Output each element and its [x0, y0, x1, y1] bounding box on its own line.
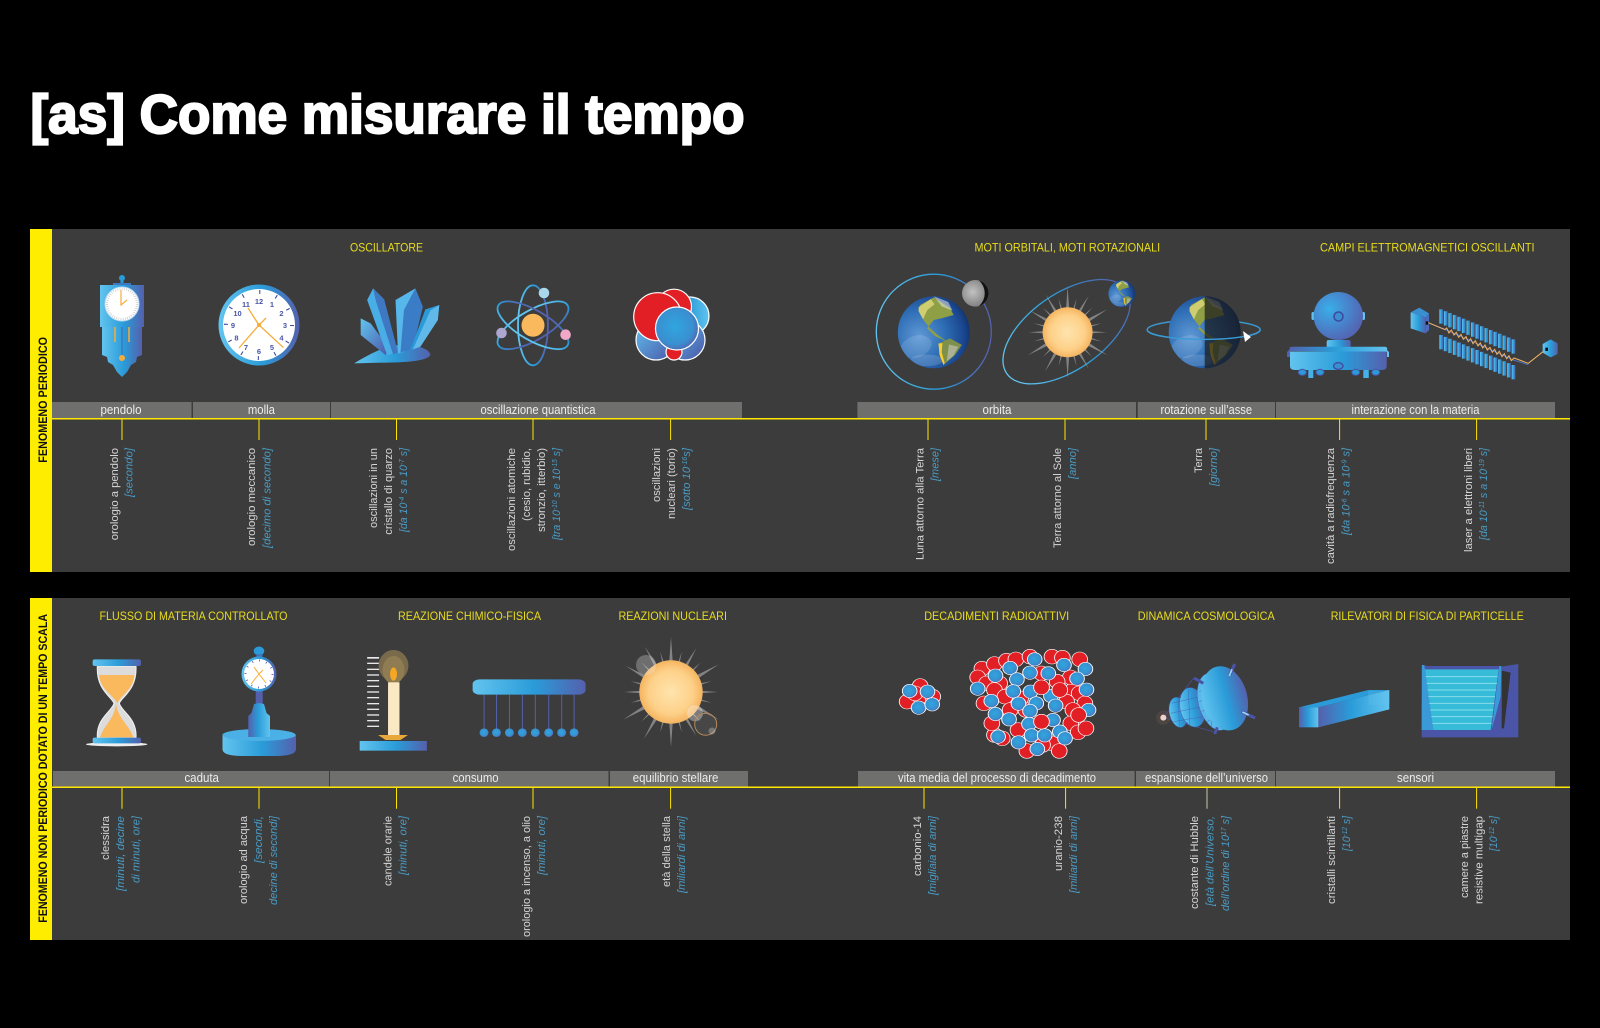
title: [as] Come misurare il tempo: [30, 83, 744, 145]
label: orologio ad acqua: [secondi,: [253, 816, 265, 864]
label: oscillazioni atomiche: s]: [551, 447, 563, 459]
label: costante di hubble: s]: [1220, 815, 1232, 827]
label: orologio ad acqua: [238, 815, 280, 905]
label: laser a elettroni liberi: -11: [1479, 501, 1486, 510]
label: candele orarie: [minuti, ore]: [398, 815, 410, 876]
label: camere a piastre: -12: [1489, 827, 1496, 836]
label: uranio-238: [miliardi di anni]: [1068, 815, 1080, 894]
label: costante di hubble: [età dell’Universo,: [1204, 816, 1216, 907]
label: orologio a pendolo: [secondo]: [124, 447, 136, 498]
category bar: oscillazione quantistica: oscillazione quantistica: [480, 402, 596, 417]
icon: star: [621, 637, 721, 747]
category bar: equilibrio stellare: equilibrio stellare: [633, 770, 718, 785]
label: cristallo di quarzo: s a 10: [398, 464, 410, 497]
icon: mechanical wall clock: 10: [233, 309, 242, 318]
label: terra: Terra: [1193, 447, 1205, 473]
icon: mechanical wall clock: 11: [242, 300, 250, 309]
label: oscillazioni atomiche: [506, 447, 563, 551]
label: eta della stella: [661, 815, 688, 894]
label: cavita a radiofrequenza: -6: [1342, 498, 1348, 505]
label: cristalli scintillanti: [1326, 815, 1353, 904]
label: orologio meccanico: [decimo di secondo]: [262, 447, 274, 549]
label: cavita a radiofrequenza: [da 10: [1340, 504, 1352, 535]
label: cristallo di quarzo: [368, 447, 410, 535]
icon: free electron laser: [1411, 308, 1558, 379]
label: laser a elettroni liberi: -19: [1479, 459, 1486, 469]
label: luna attorno alla terra: [mese]: [930, 447, 942, 482]
icon: mechanical wall clock: 12: [255, 297, 263, 306]
label: eta della stella: età della stella: [661, 815, 673, 887]
label: cristallo di quarzo: s]: [398, 447, 410, 459]
label: carbonio-14: [912, 815, 939, 896]
label: uranio-238: [1053, 815, 1080, 894]
icon: mechanical wall clock: [218, 284, 300, 366]
category bar: espansione dell'universo: espansione dell’universo: [1145, 770, 1268, 785]
category bar: molla: [193, 402, 330, 418]
label: terra attorno al sole: Terra attorno al Sole: [1052, 448, 1064, 548]
label: camere a piastre: camere a piastre: [1459, 816, 1471, 898]
category bar: vita media: vita media del processo di decadimento: [898, 770, 1096, 785]
label: clessidra: [minuti, decine: [115, 816, 127, 892]
category bar: orbita: [857, 402, 1136, 418]
label: orologio ad acqua: decine di secondi]: [268, 815, 280, 905]
heading: reazioni nucleari: REAZIONI NUCLEARI: [618, 609, 727, 623]
label: oscillazioni nucleari: [651, 447, 693, 519]
label: luna attorno alla terra: [914, 447, 942, 560]
label: orologio a pendolo: [109, 447, 136, 540]
label: uranio-238: uranio-238: [1053, 816, 1065, 871]
label: oscillazioni atomiche: [tra 10: [551, 508, 563, 540]
label: oscillazioni nucleari: s]: [681, 447, 693, 457]
yellow side label: fenomeno non periodico: FENOMENO NON PERIODICO DOTATO DI UN TEMPO SCALA: [36, 614, 50, 923]
label: cristallo di quarzo: -7: [399, 458, 406, 465]
label: oscillazioni atomiche: oscillazioni atomiche: [506, 448, 518, 551]
icon: mechanical wall clock: 1: [270, 300, 274, 309]
label: cristallo di quarzo: -4: [399, 497, 406, 503]
category bar: pendolo: pendolo: [100, 402, 142, 417]
label: camere a piastre: s]: [1488, 815, 1500, 827]
label: luna attorno alla terra: Luna attorno alla Terra: [914, 447, 926, 560]
label: oscillazioni nucleari: nucleari (torio): [666, 448, 678, 519]
icon: mechanical wall clock: 7: [244, 343, 248, 352]
label: oscillazioni nucleari: -16: [682, 457, 689, 467]
heading: decadimenti radioattivi: DECADIMENTI RADIOATTIVI: [924, 609, 1069, 623]
label: clessidra: di minuti, ore]: [130, 815, 142, 883]
icon: atom: [491, 285, 575, 365]
category bar: interazione con la materia: [1276, 402, 1555, 418]
icon: carbon-14 nucleus: [899, 679, 941, 714]
heading: rilevatori: RILEVATORI DI FISICA DI PARTICELLE: [1331, 609, 1524, 623]
heading: moti orbitali: MOTI ORBITALI, MOTI ROTAZIONALI: [974, 241, 1160, 255]
icon: mechanical wall clock: 9: [231, 321, 235, 330]
timeline axis with ticks: [52, 419, 1570, 440]
category bar: rotazione sull'asse: rotazione sull’asse: [1161, 402, 1252, 417]
label: terra: [1193, 447, 1220, 487]
label: costante di hubble: 17: [1221, 826, 1228, 835]
icon: pendulum clock: [100, 275, 144, 377]
label: laser a elettroni liberi: s]: [1478, 447, 1490, 459]
icon: multigap resistive plate chamber: [1422, 664, 1518, 737]
label: terra attorno al sole: [anno]: [1067, 447, 1079, 480]
icon: mechanical wall clock: 5: [270, 343, 274, 352]
label: carbonio-14: carbonio-14: [912, 816, 924, 876]
category bar: caduta: [53, 770, 329, 787]
icon: uranium-238 nucleus: [970, 649, 1096, 758]
label: laser a elettroni liberi: [da 10: [1478, 509, 1490, 540]
label: orologio meccanico: [246, 447, 274, 549]
icon: mechanical wall clock: 3: [283, 321, 287, 330]
icon: moon orbiting earth: [876, 274, 991, 389]
label: oscillazioni atomiche: (cesio, rubidio,: [521, 448, 533, 521]
label: orologio a incenso: orologio a incenso, a olio: [521, 816, 533, 937]
label: cristallo di quarzo: cristallo di quarzo: [383, 448, 395, 535]
category bar: orbita: orbita: [982, 402, 1012, 417]
label: carbonio-14: [migliaia di anni]: [927, 815, 939, 896]
label: oscillazioni atomiche: stronzio, itterbio): [536, 448, 548, 532]
category bar: consumo: consumo: [453, 770, 499, 785]
icon: hourglass: [86, 659, 147, 746]
label: oscillazioni nucleari: oscillazioni: [651, 448, 663, 502]
icon: radiofrequency cavity: [1287, 292, 1389, 378]
icon: earth rotating on axis: [1147, 296, 1260, 368]
icon: water clock: [222, 646, 296, 756]
label: cavita a radiofrequenza: cavità a radiofrequenza: [1325, 447, 1337, 564]
label: laser a elettroni liberi: s a 10: [1478, 468, 1490, 501]
category bar: interazione con la materia: interazione con la materia: [1352, 402, 1480, 417]
label: oscillazioni atomiche: s e 10: [551, 468, 563, 500]
category bar: sensori: sensori: [1397, 770, 1434, 785]
label: cristalli scintillanti: -12: [1342, 827, 1349, 836]
category bar: molla: molla: [248, 402, 276, 417]
category bar: caduta: caduta: [184, 770, 220, 785]
heading: reazione chimico-fisica: REAZIONE CHIMICO-FISICA: [398, 609, 541, 623]
category bar: sensori: [1276, 770, 1555, 787]
label: cavita a radiofrequenza: -9: [1342, 459, 1348, 466]
label: orologio a incenso: [minuti, ore]: [536, 815, 548, 876]
category bar: equilibrio stellare: [610, 770, 748, 787]
icon: scintillating crystal: [1299, 690, 1389, 727]
label: candele orarie: [382, 815, 410, 886]
yellow side label: fenomeno periodico: [30, 229, 52, 572]
icon: quartz crystals: [354, 288, 439, 363]
timeline axis with ticks: [52, 787, 1570, 809]
icon: incense clock: [473, 679, 586, 737]
label: cristallo di quarzo: oscillazioni in un: [368, 448, 380, 528]
label: orologio a incenso: [521, 815, 548, 937]
label: laser a elettroni liberi: laser a elettroni liberi: [1463, 448, 1475, 552]
label: clessidra: [100, 815, 142, 892]
heading: campi elettromagnetici: CAMPI ELETTROMAGNETICI OSCILLANTI: [1320, 241, 1535, 255]
label: oscillazioni atomiche: -15: [552, 459, 559, 469]
icon: mechanical wall clock: 2: [279, 309, 284, 318]
label: terra: [giorno]: [1208, 447, 1220, 487]
icon: earth orbiting sun: [985, 259, 1148, 405]
label: oscillazioni atomiche: -10: [552, 500, 559, 510]
label: cristalli scintillanti: [10: [1341, 835, 1353, 851]
label: cristalli scintillanti: s]: [1341, 815, 1353, 827]
category bar: consumo: [330, 770, 608, 787]
icon: mechanical wall clock: 6: [257, 347, 261, 356]
icon: expanding universe: [1156, 661, 1255, 736]
panel: fenomeno non periodico: [30, 598, 1570, 940]
label: camere a piastre: resistive multigap: [1474, 816, 1486, 904]
label: costante di hubble: [1189, 815, 1232, 911]
heading: flusso di materia: FLUSSO DI MATERIA CONTROLLATO: [100, 609, 288, 623]
panel: fenomeno periodico: [30, 229, 1570, 572]
label: cavita a radiofrequenza: [1325, 447, 1352, 564]
label: camere a piastre: [1459, 815, 1500, 904]
category bar: pendolo: [52, 402, 192, 418]
label: candele orarie: candele orarie: [382, 816, 394, 886]
heading: oscillatore: OSCILLATORE: [350, 241, 423, 255]
icon: candle clock: [360, 650, 427, 751]
icon: atomic nucleus: [634, 289, 709, 360]
label: orologio ad acqua: orologio ad acqua: [238, 815, 250, 904]
label: oscillazioni nucleari: [sotto 10: [681, 467, 693, 510]
label: costante di hubble: dell’ordine di 10: [1220, 833, 1232, 911]
label: cavita a radiofrequenza: s]: [1340, 447, 1352, 460]
yellow side label: fenomeno periodico: FENOMENO PERIODICO: [36, 337, 50, 463]
label: terra attorno al sole: [1052, 447, 1079, 548]
label: clessidra: clessidra: [100, 815, 112, 860]
label: cavita a radiofrequenza: s a 10: [1340, 465, 1352, 498]
yellow side label: fenomeno non periodico: [30, 598, 52, 940]
label: eta della stella: [miliardi di anni]: [676, 815, 688, 894]
label: laser a elettroni liberi: [1463, 447, 1490, 552]
heading: dinamica cosmologica: DINAMICA COSMOLOGICA: [1138, 609, 1275, 623]
label: orologio meccanico: orologio meccanico: [246, 448, 258, 546]
label: costante di hubble: costante di Hubble: [1189, 816, 1201, 909]
category bar: oscillazione quantistica: [331, 402, 742, 418]
label: orologio a pendolo: orologio a pendolo: [109, 448, 121, 540]
icon: mechanical wall clock: 4: [279, 334, 284, 342]
label: cristallo di quarzo: [da 10: [398, 501, 410, 532]
label: camere a piastre: [10: [1488, 835, 1500, 851]
icon: mechanical wall clock: 8: [234, 334, 239, 342]
label: cristalli scintillanti: cristalli scintillanti: [1326, 816, 1338, 904]
